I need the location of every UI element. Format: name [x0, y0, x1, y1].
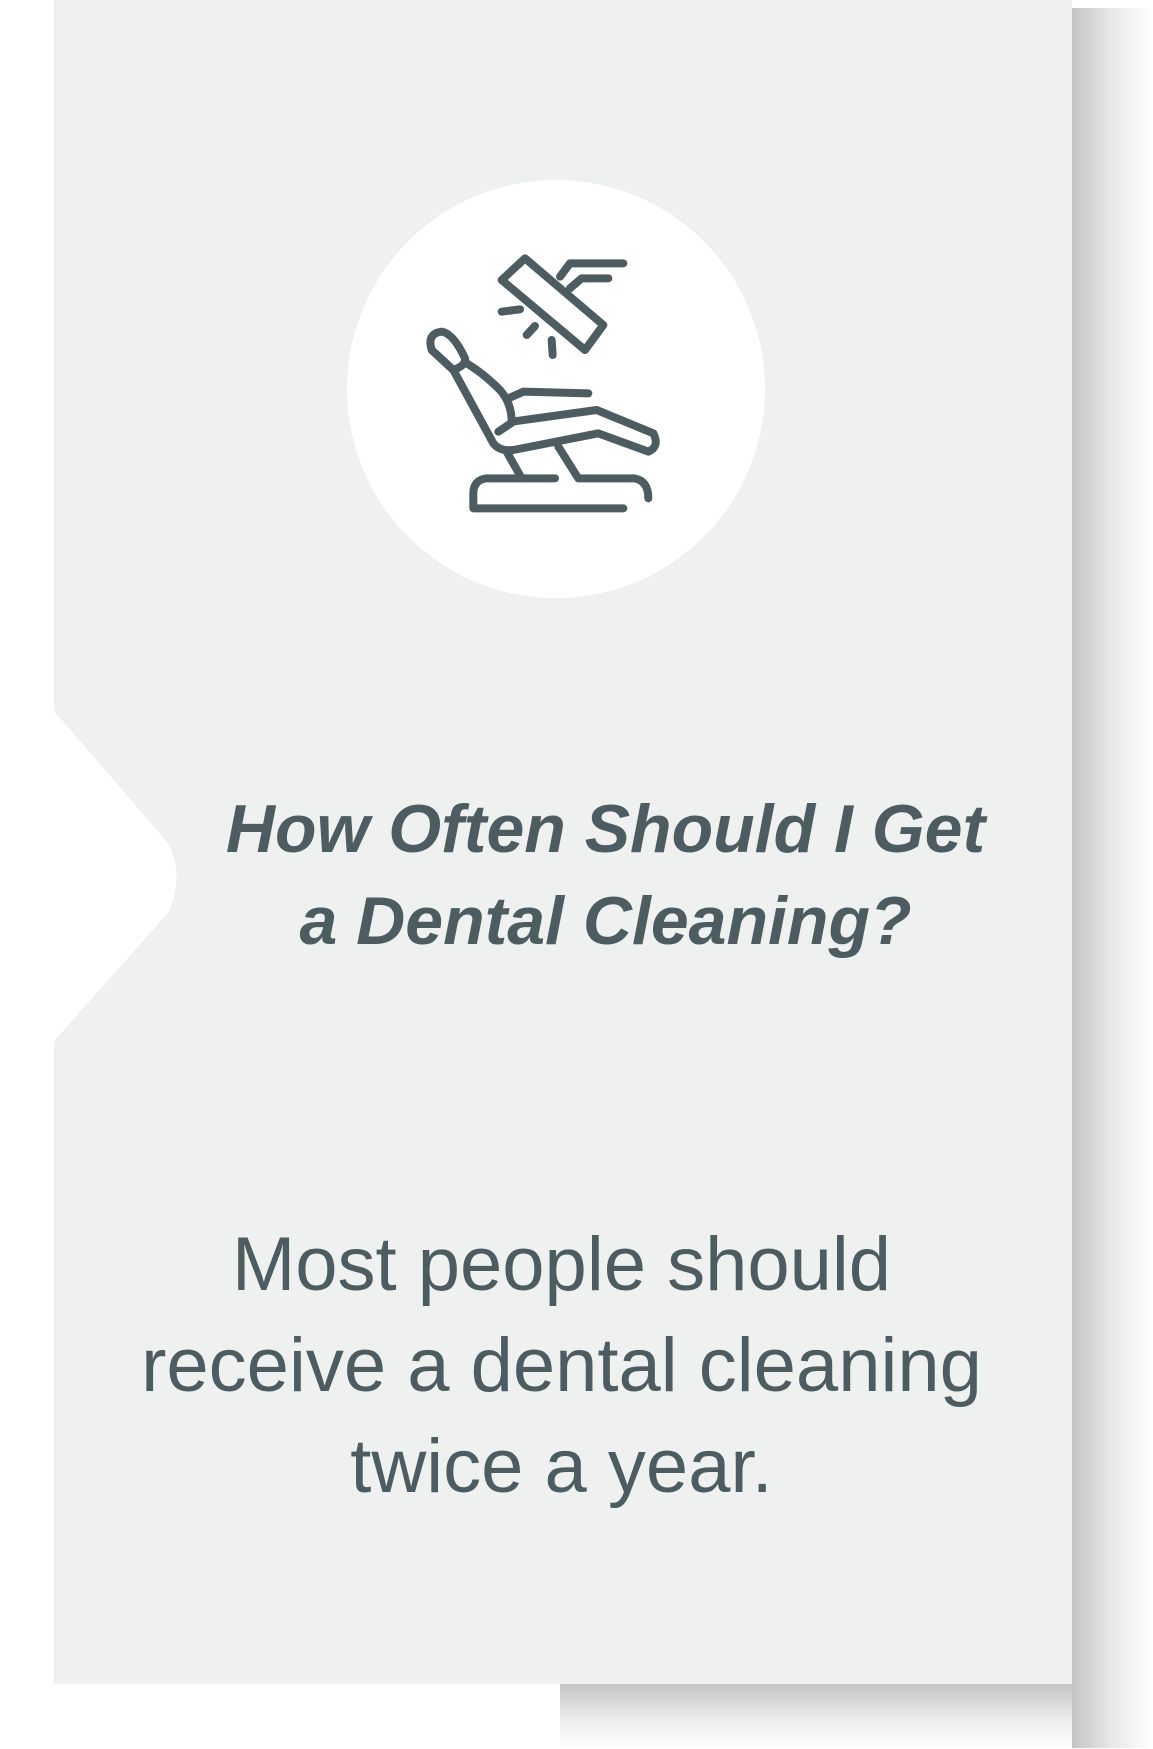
- title: How Often Should I Get: [226, 791, 985, 867]
- shadow bottom: [560, 1684, 1072, 1749]
- body text: receive a dental cleaning: [141, 1323, 982, 1408]
- title: a Dental Cleaning?: [299, 883, 912, 959]
- icon circle: [347, 180, 765, 598]
- icon: dental chair: [426, 254, 660, 512]
- shadow right: [1072, 8, 1153, 1748]
- body text: twice a year.: [350, 1424, 773, 1509]
- body text: Most people should: [232, 1222, 891, 1307]
- title: [226, 791, 988, 959]
- body text: [141, 1222, 982, 1509]
